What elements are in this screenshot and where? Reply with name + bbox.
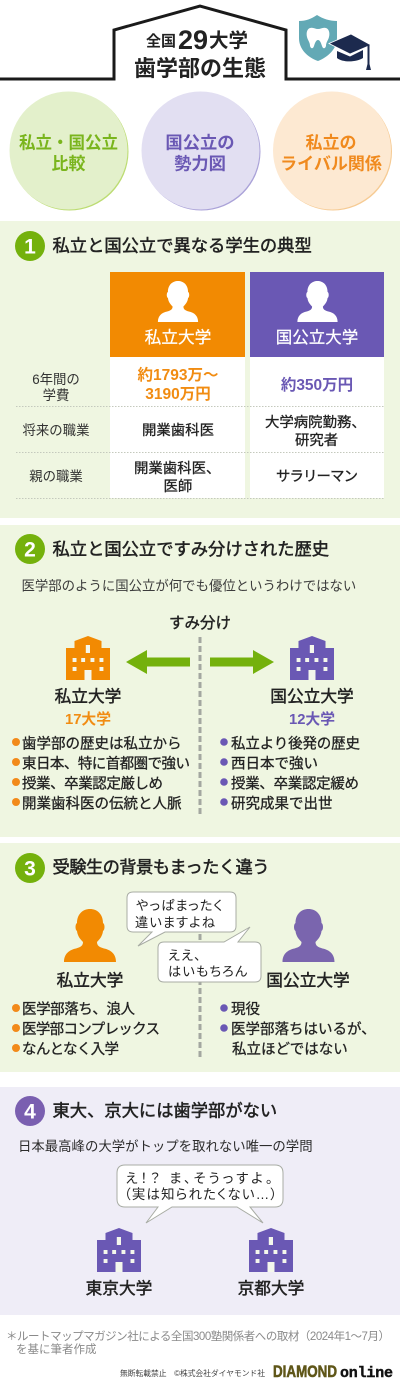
icon: tooth shield and graduation cap (299, 15, 371, 70)
source note: ＊ルートマップマガジン社による全国300塾関係者への取材（2024年1～7月） (6, 1329, 390, 1343)
row: future career (23, 414, 366, 449)
row: tuition: 約350万円 (281, 376, 353, 394)
private list: 医学部コンプレックス (22, 1021, 160, 1038)
public list: 医学部落ちはいるが、 (231, 1021, 376, 1038)
heading 4: 東大、京大には歯学部がない (52, 1100, 277, 1120)
public label: 国公立大学 (270, 687, 354, 706)
logo: DIAMOND online: DIAMOND (273, 1362, 337, 1381)
badge 2: 2 (24, 538, 36, 562)
source note (6, 1329, 390, 1356)
label: Tokyo University: 東京大学 (86, 1279, 152, 1298)
table: public column (250, 272, 384, 498)
badge 3 (15, 853, 45, 883)
bubble: public: はいもちろん (168, 964, 248, 979)
panel: section 1 (0, 221, 400, 518)
row: parents' occupation (29, 460, 358, 495)
public list: 私立より後発の歴史 (231, 736, 360, 752)
public label: 国公立大学 (266, 971, 350, 990)
row: tuition (32, 366, 353, 403)
arrow left (126, 650, 190, 674)
public label: 12大学 (289, 710, 335, 728)
bubble: public: ええ、 (168, 948, 202, 963)
panel: section 4 (0, 1087, 400, 1315)
subheading 4: 日本最高峰の大学がトップを取れない唯一の学問 (18, 1138, 313, 1154)
circle: 国公立の勢力図: 国公立の (165, 132, 235, 152)
row: tuition: 3190万円 (145, 386, 211, 403)
row: tuition: 学費 (43, 388, 69, 403)
private label: 17大学 (65, 710, 111, 728)
private list: なんとなく入学 (22, 1041, 119, 1058)
private label (55, 687, 121, 728)
row: parents' occupation: 親の職業 (29, 469, 83, 484)
label: sumiwake: すみ分け (169, 614, 231, 632)
label: Kyoto University: 京都大学 (238, 1279, 304, 1298)
public list (220, 736, 360, 812)
private label: 私立大学 (55, 687, 121, 706)
row: parents' occupation: サラリーマン (276, 469, 358, 485)
badge 4 (15, 1096, 45, 1126)
row: future career: 開業歯科医 (142, 422, 214, 439)
icon: Kyoto University building (249, 1228, 293, 1272)
title: 歯学部の生態 (134, 56, 266, 81)
logo: DIAMOND online (273, 1362, 393, 1382)
heading 1: 私立と国公立で異なる学生の典型 (52, 236, 312, 256)
public list: 私立ほどではない (232, 1041, 348, 1058)
badge 4: 4 (24, 1100, 36, 1124)
row: tuition: 約1793万〜 (138, 366, 218, 384)
circle: 私立のライバル関係: 私立の (306, 134, 356, 152)
circle: 国公立の勢力図: 勢力図 (174, 154, 226, 174)
bubble: both universities: え！？ ま、そうっすよ。 (126, 1171, 272, 1186)
public list: 授業、卒業認定緩め (231, 776, 359, 792)
bubble: private: 違いますよね (135, 915, 216, 930)
subheading 2: 医学部のように国公立が何でも優位というわけではない (22, 578, 356, 594)
table: private column: 私立大学 (145, 328, 211, 347)
circle: 私立のライバル関係: ライバル関係 (280, 154, 382, 174)
header: house outline (0, 6, 400, 79)
circle: 私立・国公立比較: 比較 (52, 154, 86, 174)
icon: private student (64, 909, 116, 962)
private list: 東日本、特に首都圏で強い (22, 756, 190, 772)
icon: Tokyo University building (97, 1228, 141, 1272)
icon: private building (66, 636, 110, 680)
row: parents' occupation: 開業歯科医、 (134, 460, 220, 477)
copyright: 無断転載禁止 ©株式会社ダイヤモンド社 (120, 1368, 265, 1378)
panel: section 3 (0, 843, 400, 1072)
private list (12, 1001, 160, 1058)
circle: 私立のライバル関係 (273, 92, 392, 210)
private list: 医学部落ち、浪人 (22, 1001, 136, 1018)
private label: 私立大学 (57, 971, 123, 990)
title (134, 25, 266, 81)
public list: 西日本で強い (231, 756, 318, 772)
row: future career: 研究者 (295, 432, 338, 449)
badge 1 (15, 231, 45, 261)
circle: 私立・国公立比較 (10, 92, 128, 210)
private list: 開業歯科医の伝統と人脈 (22, 796, 182, 812)
public list (220, 1001, 376, 1058)
badge 1: 1 (24, 236, 36, 258)
logo: DIAMOND online: online (340, 1365, 393, 1382)
bubble: private (127, 892, 236, 946)
row: future career: 大学病院勤務、 (265, 414, 366, 431)
public list: 研究成果で出世 (231, 796, 332, 812)
bubble: both universities (117, 1165, 283, 1223)
panel: section 2 (0, 525, 400, 837)
table: public column: 国公立大学 (276, 328, 358, 347)
table: private column (110, 272, 245, 498)
circle: 私立・国公立比較: 私立・国公立 (19, 134, 118, 152)
arrow right (210, 650, 274, 674)
bubble: both universities: （実は知られたくない…） (124, 1186, 277, 1202)
bubble: private: やっぱまったく (136, 898, 224, 913)
badge 3: 3 (24, 858, 36, 880)
icon: public building (290, 636, 334, 680)
public list: 現役 (231, 1001, 260, 1018)
badge 2 (15, 534, 45, 564)
source note: を基に筆者作成 (16, 1342, 97, 1356)
row: tuition: 6年間の (32, 372, 80, 387)
icon: public student (282, 909, 334, 962)
heading 2: 私立と国公立ですみ分けされた歴史 (52, 539, 329, 559)
row: future career: 将来の職業 (23, 423, 89, 438)
row: parents' occupation: 医師 (164, 478, 192, 495)
title: 大学 (209, 29, 248, 52)
bubble: public (158, 927, 261, 982)
title: 29 (178, 25, 208, 55)
private list (12, 736, 190, 812)
private list: 授業、卒業認定厳しめ (22, 776, 163, 792)
circle: 国公立の勢力図 (142, 92, 260, 210)
title: 全国 (146, 32, 176, 50)
private list: 歯学部の歴史は私立から (22, 736, 182, 752)
heading 3: 受験生の背景もまったく違う (52, 857, 270, 877)
public label (270, 687, 354, 728)
